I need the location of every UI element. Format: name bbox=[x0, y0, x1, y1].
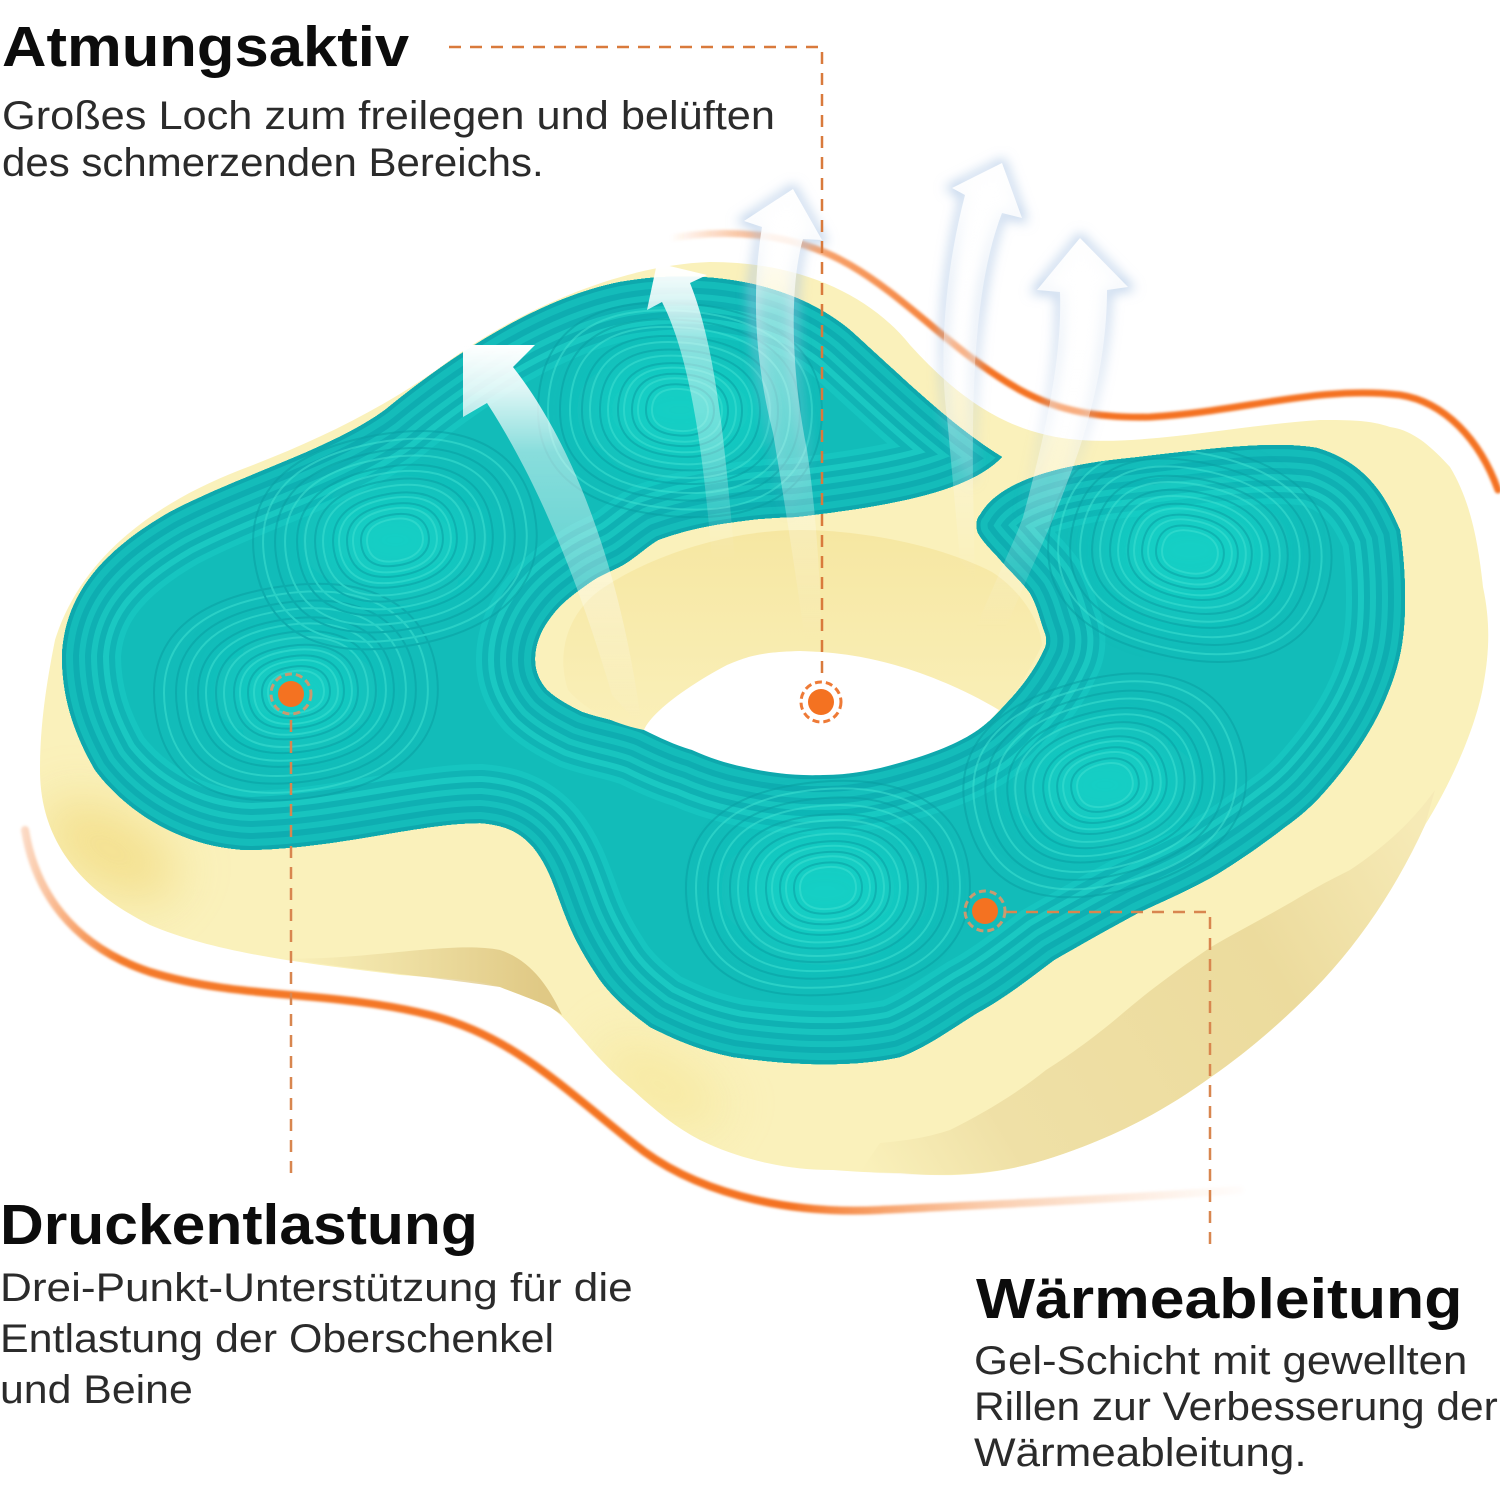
hole inner wall bbox=[563, 530, 1042, 740]
heading: Druckentlastung: Druckentlastung bbox=[0, 1193, 478, 1257]
text: Atmungsaktiv description: Großes Loch zum freilegen und belüften bbox=[2, 94, 775, 138]
heading: Waermeableitung: Wärmeableitung bbox=[976, 1267, 1462, 1331]
arrow 1 bbox=[463, 345, 642, 728]
text: Druckentlastung description: Entlastung der Oberschenkel bbox=[0, 1317, 554, 1361]
arrow 3 bbox=[744, 189, 822, 640]
marker: left gel bbox=[271, 674, 311, 714]
text: Waermeableitung description bbox=[974, 1339, 1498, 1475]
connector: Druckentlastung bbox=[290, 720, 292, 1178]
marker: hole bbox=[801, 682, 841, 722]
foam side shading, notch bbox=[280, 947, 562, 1015]
foam side shading, right bbox=[860, 790, 1435, 1175]
airflow arrows bbox=[463, 163, 1128, 728]
text: Waermeableitung description: Rillen zur Verbesserung der bbox=[974, 1385, 1498, 1429]
airflow arrow glow bbox=[744, 163, 1128, 517]
heading: Atmungsaktiv: Atmungsaktiv bbox=[2, 15, 409, 79]
arrow 4 bbox=[943, 163, 1022, 580]
illustration: gel seat cushion bbox=[20, 46, 1500, 1244]
foam body bbox=[40, 262, 1488, 1175]
orange swoosh top right bbox=[660, 233, 1498, 490]
gel layer bbox=[62, 277, 1405, 1064]
text: Atmungsaktiv description: des schmerzenden Bereichs. bbox=[2, 141, 544, 185]
hole opening bbox=[644, 651, 999, 775]
foam yellow shade bbox=[26, 780, 736, 1146]
gel ripple rings bbox=[141, 292, 1351, 1006]
text: Druckentlastung description: Drei-Punkt-Unterstützung für die bbox=[0, 1266, 633, 1310]
marker: right gel bbox=[965, 891, 1005, 931]
arrow 2 bbox=[647, 263, 735, 560]
orange swoosh bottom left bbox=[25, 830, 1240, 1211]
gel peak highlights bbox=[226, 355, 1275, 950]
text: Atmungsaktiv description bbox=[2, 94, 775, 185]
text: Waermeableitung description: Gel-Schicht mit gewellten bbox=[974, 1339, 1467, 1383]
arrow 5 bbox=[975, 238, 1128, 630]
text: Druckentlastung description: und Beine bbox=[0, 1368, 193, 1412]
text: Waermeableitung description: Wärmeableitung. bbox=[974, 1431, 1307, 1475]
text: Druckentlastung description bbox=[0, 1266, 633, 1412]
connector: Atmungsaktiv bbox=[449, 47, 822, 680]
connector: Waermeableitung bbox=[1005, 912, 1210, 1250]
